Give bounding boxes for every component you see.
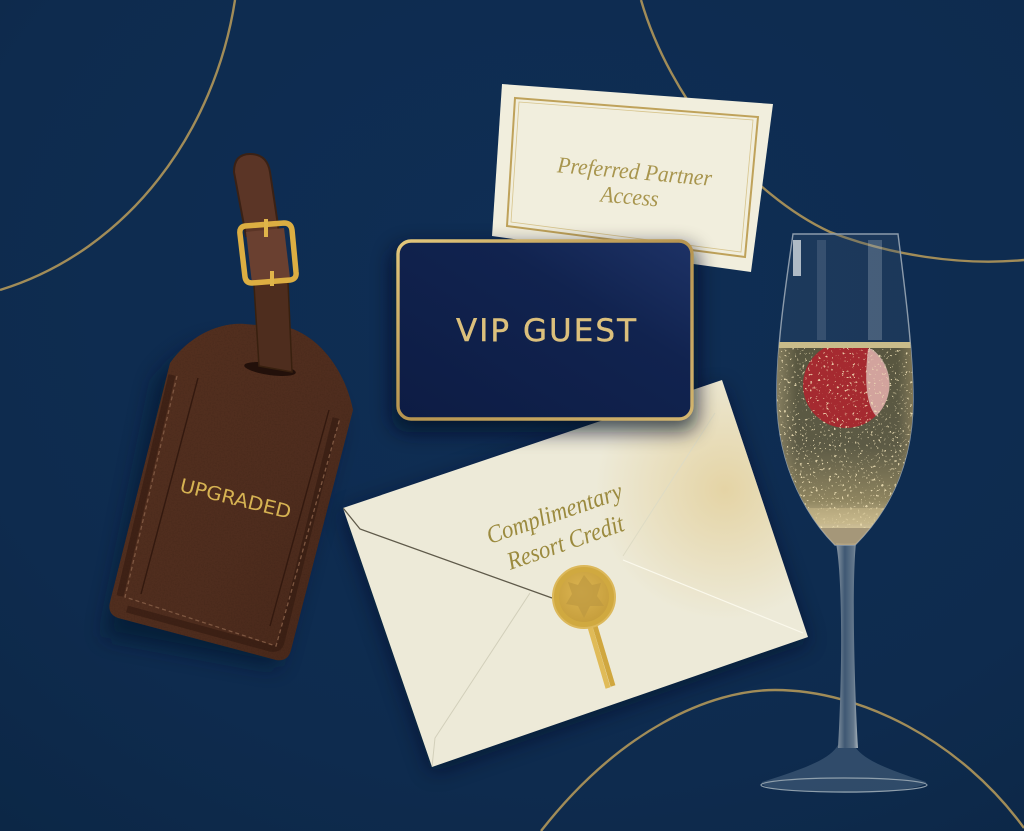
envelope text [483,478,629,576]
buckle [240,219,296,286]
tag label: UPGRADED [177,475,293,524]
champagne flute [761,234,927,793]
strap keeper [246,228,290,283]
envelope text: Complimentary [483,478,627,550]
champagne liquid [776,342,913,545]
envelope [343,380,808,773]
VIP guest card [392,241,698,432]
card text: Preferred Partner [555,152,714,191]
strap loop [254,282,292,372]
flute stem [836,543,858,748]
envelope folds [343,413,803,767]
wax seal [553,566,615,688]
flute foot [761,745,927,793]
tag stitching [125,376,340,646]
tag slot [243,359,297,379]
tag strap [234,154,293,372]
cream card: Preferred Partner Access [492,84,773,272]
card text [555,152,714,212]
raspberry [803,342,890,428]
card label: VIP GUEST [456,313,637,349]
luggage tag [100,154,360,668]
bubbles [777,348,913,528]
envelope text: Resort Credit [503,510,629,576]
tag body [109,324,353,660]
flute bowl [777,234,913,545]
bowl highlights [793,240,882,340]
card text: Access [598,181,660,212]
